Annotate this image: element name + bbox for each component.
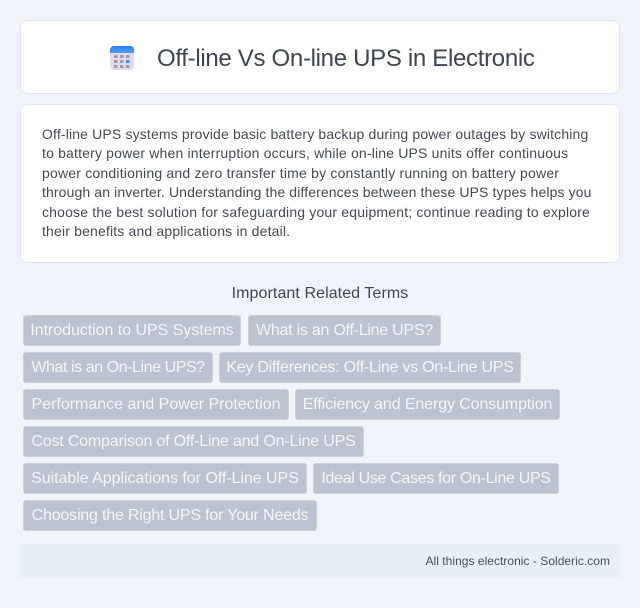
description text bbox=[42, 126, 592, 239]
tag: Cost Comparison of Off-Line and On-Line UPS bbox=[31, 433, 356, 450]
tag: Efficiency and Energy Consumption bbox=[303, 396, 552, 413]
tag: What is an On-Line UPS? bbox=[31, 359, 205, 376]
tag bbox=[23, 426, 364, 457]
related terms tags bbox=[23, 315, 560, 531]
tag bbox=[219, 352, 521, 383]
tag bbox=[23, 315, 241, 346]
tag bbox=[23, 352, 213, 383]
footer credit: All things electronic - Solderic.com bbox=[426, 554, 610, 568]
tag: Introduction to UPS Systems bbox=[30, 322, 234, 339]
tag: Key Differences: Off-Line vs On-Line UPS bbox=[226, 359, 514, 376]
description text: to battery power when interruption occurs, while on-line UPS units offer continuous bbox=[42, 145, 568, 161]
tag: Choosing the Right UPS for Your Needs bbox=[32, 507, 308, 524]
tag bbox=[248, 315, 441, 346]
tag bbox=[23, 463, 307, 494]
tag: What is an Off-Line UPS? bbox=[256, 322, 433, 339]
tag bbox=[313, 463, 559, 494]
footer bbox=[20, 544, 620, 578]
tag bbox=[295, 389, 560, 420]
tag: Performance and Power Protection bbox=[31, 396, 280, 413]
tag bbox=[23, 389, 289, 420]
description text: through an inverter. Understanding the differences between these UPS types helps you bbox=[42, 184, 592, 200]
description text: Off-line UPS systems provide basic battery backup during power outages by switching bbox=[42, 126, 588, 142]
tag: Ideal Use Cases for On-Line UPS bbox=[321, 470, 551, 487]
description text: choose the best solution for safeguarding your equipment; continue reading to explore bbox=[42, 204, 590, 220]
heading: related terms: Important Related Terms bbox=[232, 285, 408, 302]
tag bbox=[23, 500, 317, 531]
panel: description bbox=[20, 104, 620, 263]
description text: power conditioning and zero transfer time by constantly running on battery power bbox=[42, 165, 559, 181]
title: Off-line Vs On-line UPS in Electronic bbox=[157, 45, 535, 72]
icon: calendar bbox=[110, 46, 134, 70]
header panel bbox=[20, 20, 620, 94]
tag: Suitable Applications for Off-Line UPS bbox=[31, 470, 299, 487]
description text: their benefits and applications in detail. bbox=[42, 223, 290, 239]
